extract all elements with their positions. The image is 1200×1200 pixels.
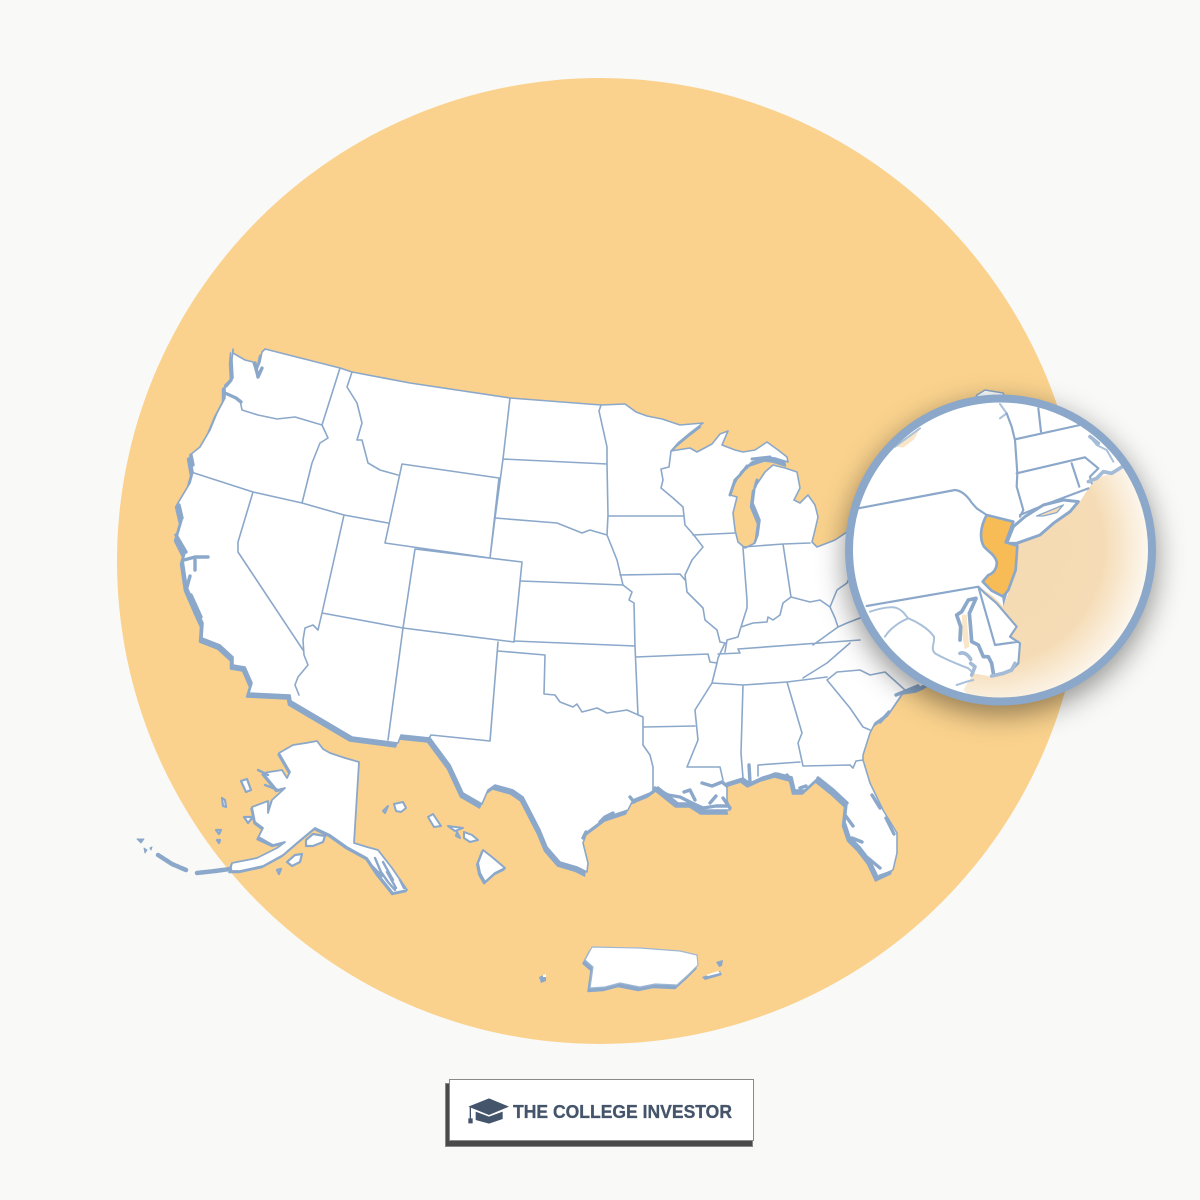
pale shoreline details xyxy=(870,404,1113,685)
coastal detail xyxy=(176,363,918,876)
lens ring xyxy=(849,398,1152,702)
contiguous states xyxy=(174,349,1060,881)
lens shadow xyxy=(844,403,1156,715)
coastline lines xyxy=(858,408,1098,670)
lower bay and cape shores xyxy=(960,437,1123,676)
logo wordmark: THE COLLEGE INVESTOR xyxy=(513,1101,732,1122)
Chesapeake shores xyxy=(957,598,993,673)
badge box xyxy=(450,1080,754,1140)
New Jersey highlighted xyxy=(981,515,1017,597)
lens contents xyxy=(853,402,1148,698)
Cape May xyxy=(1002,592,1008,606)
Long Island xyxy=(1007,500,1078,543)
ocean xyxy=(964,468,1148,698)
magnifier lens focused on New Jersey xyxy=(844,398,1173,715)
background circle xyxy=(117,78,1083,1044)
map of the United States xyxy=(137,349,1060,992)
badge shadow xyxy=(446,1084,752,1146)
Puerto Rico xyxy=(539,947,723,992)
Alaska xyxy=(137,741,407,894)
Hawaii xyxy=(383,802,505,884)
logo badge xyxy=(446,1080,754,1146)
icon: graduation cap xyxy=(468,1098,509,1124)
lake and bay tints xyxy=(896,428,969,649)
